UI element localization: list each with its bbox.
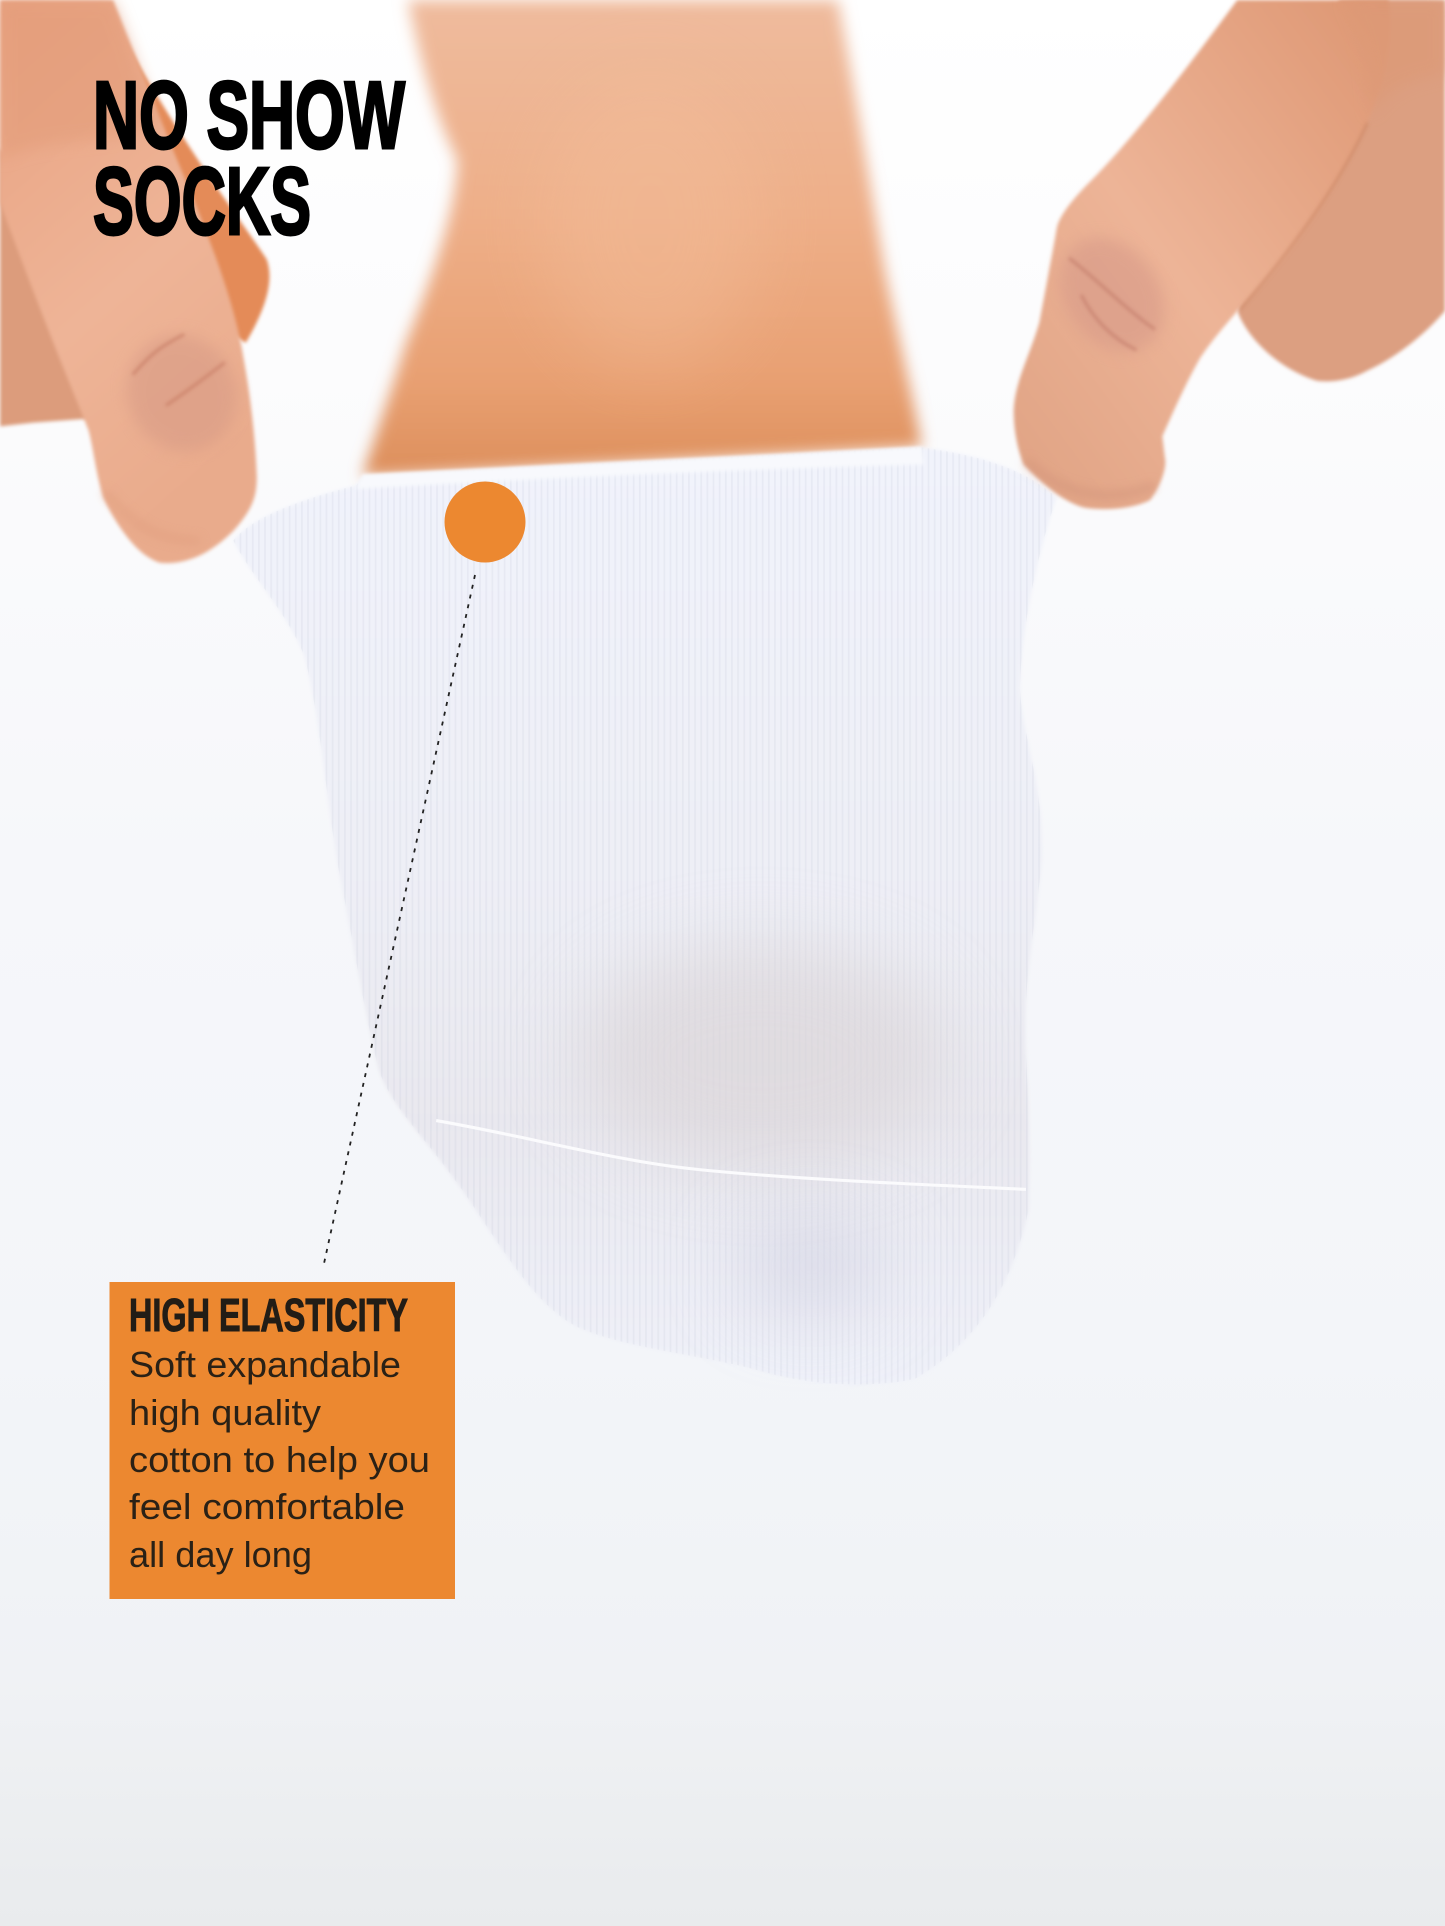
dotted leader line (323, 575, 475, 1268)
toe seam (436, 1121, 1026, 1189)
right hand (1014, 0, 1445, 509)
title: SOCKS (93, 148, 311, 255)
leg (362, 0, 922, 477)
callout body text: cotton to help you (129, 1439, 430, 1480)
left hand (0, 0, 269, 563)
callout marker dot (444, 482, 526, 562)
callout body text: feel comfortable (129, 1486, 405, 1527)
sock (233, 447, 1057, 1384)
callout body text: high quality (129, 1392, 321, 1433)
callout: high elasticity (110, 1282, 455, 1599)
callout heading: HIGH ELASTICITY (129, 1289, 408, 1341)
callout body text (129, 1344, 430, 1575)
title: NO SHOW (93, 62, 405, 169)
photo: foot in sock and fingers (0, 0, 1445, 1384)
callout box (110, 1282, 455, 1599)
callout body text: Soft expandable (129, 1344, 401, 1385)
title (93, 62, 405, 255)
callout body text: all day long (129, 1534, 312, 1575)
